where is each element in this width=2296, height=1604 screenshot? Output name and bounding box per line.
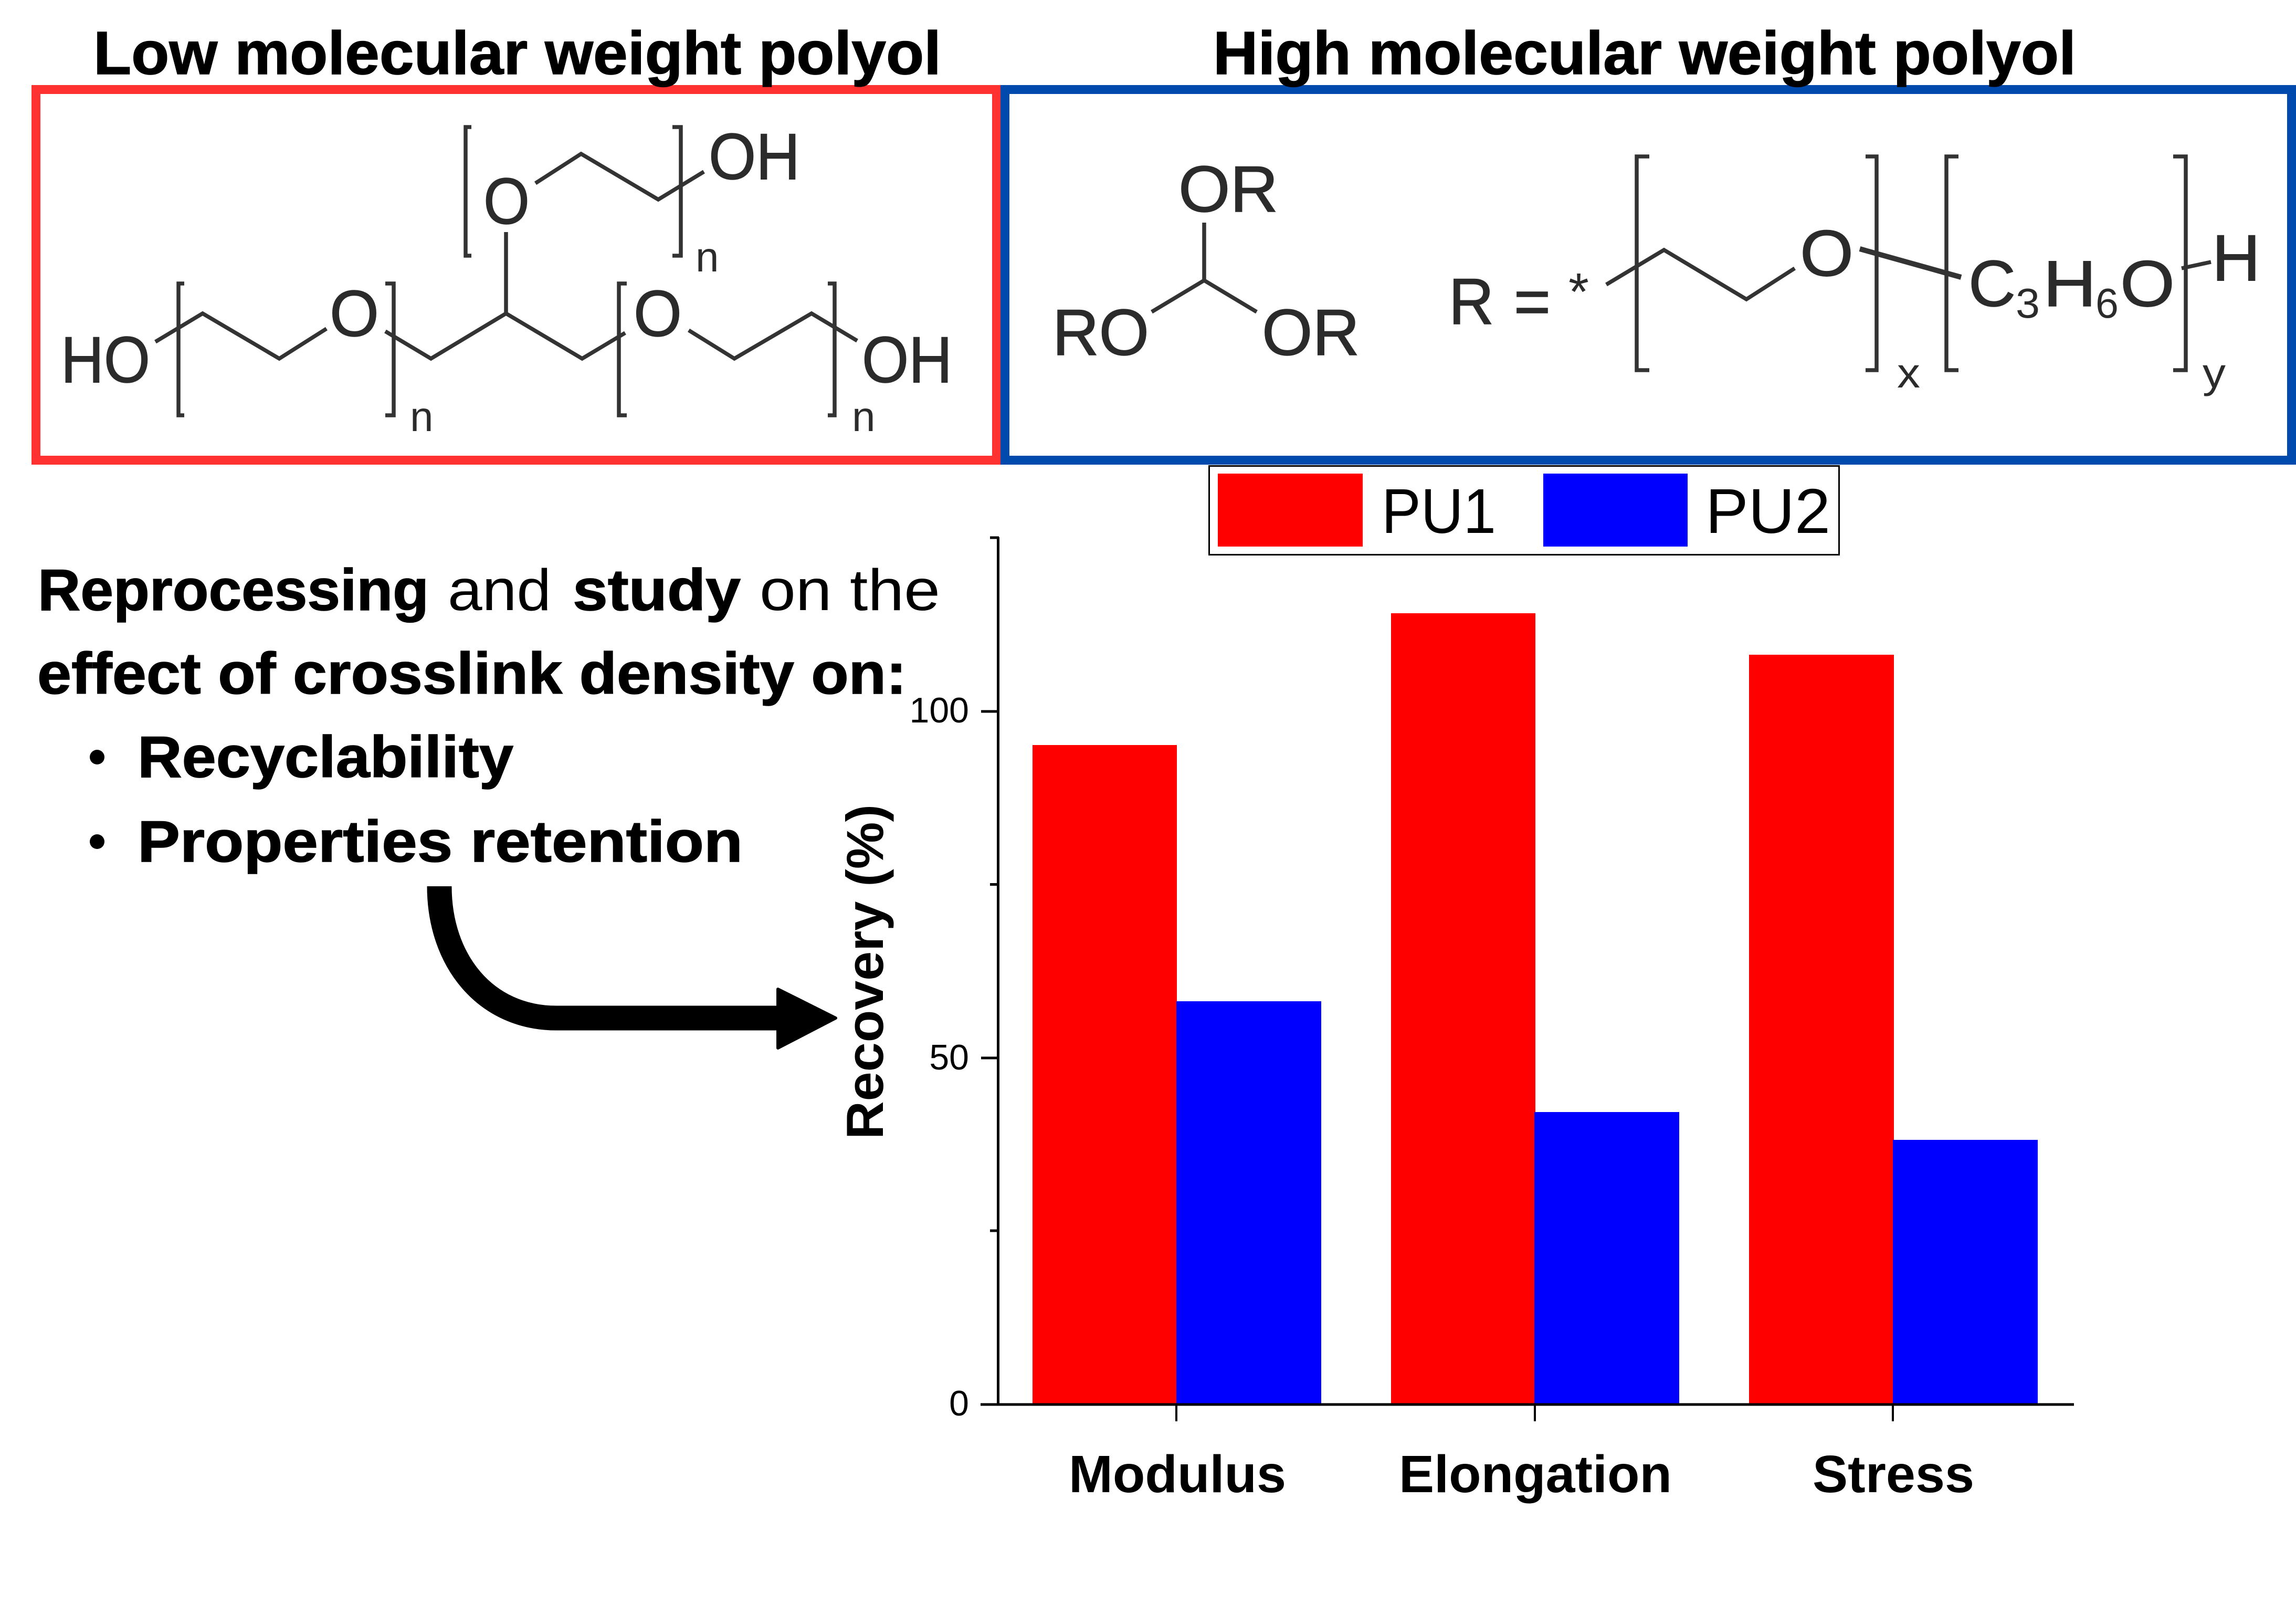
panel: low molecular weight polyol frame	[36, 89, 996, 460]
atom labels: HO	[61, 324, 150, 396]
chemical structure: high molecular weight polyol: y	[2203, 350, 2226, 396]
brackets	[178, 127, 835, 415]
chemical structure: high molecular weight polyol: RO	[1052, 297, 1149, 369]
chemical structure: high molecular weight polyol	[1052, 153, 2260, 396]
chemical structure: high molecular weight polyol: O	[1800, 217, 1853, 290]
bullet: properties retention: Properties retention	[138, 809, 743, 874]
category label: stress: Stress	[1813, 1445, 1974, 1504]
chemical structure: high molecular weight polyol: =	[1514, 266, 1551, 338]
y tick labels: 0	[949, 1383, 969, 1423]
legend label: PU1: PU1	[1382, 475, 1496, 547]
chemical structure: low molecular weight polyol: n	[696, 234, 719, 280]
y axis	[981, 537, 999, 1404]
legend swatch: PU2	[1543, 474, 1688, 547]
legend label: PU2: PU2	[1705, 475, 1830, 547]
bonds	[155, 154, 857, 359]
heading: low molecular weight polyol: Low molecular weight polyol	[93, 19, 941, 87]
bullet: recyclability: Recyclability	[138, 725, 513, 790]
bar chart: recovery percentage	[836, 537, 2074, 1504]
chemical structure: low molecular weight polyol	[61, 121, 952, 440]
chemical structure: low molecular weight polyol: O	[483, 165, 530, 238]
y tick labels	[910, 690, 969, 1423]
chemical structure: high molecular weight polyol: R	[1449, 266, 1494, 338]
text block: reprocessing study description: Reprocessing	[38, 558, 429, 623]
brackets	[1637, 156, 2186, 370]
bars: modulus	[1033, 745, 1321, 1403]
chemical structure: low molecular weight polyol: n	[410, 393, 434, 440]
x axis	[981, 1403, 2074, 1406]
y tick labels: 50	[929, 1037, 969, 1077]
heading: high molecular weight polyol: High molecular weight polyol	[1213, 19, 2076, 87]
chemical structure: low molecular weight polyol: O	[330, 278, 379, 350]
chemical structure: low molecular weight polyol: O	[634, 278, 682, 350]
text block: reprocessing study description	[37, 558, 940, 874]
chemical structure: low molecular weight polyol: OH	[709, 121, 800, 193]
legend	[1209, 466, 1839, 554]
y axis title: Recovery (%)	[836, 804, 894, 1139]
category label: elongation: Elongation	[1399, 1445, 1672, 1504]
chemical structure: high molecular weight polyol: O	[2120, 248, 2175, 320]
chemical structure: low molecular weight polyol: OH	[862, 324, 952, 396]
bonds	[1152, 223, 2211, 312]
text block: reprocessing study description: and	[448, 558, 551, 623]
chemical structure: low molecular weight polyol: n	[852, 393, 876, 440]
chemical structure: high molecular weight polyol: x	[1897, 350, 1920, 396]
chemical structure: high molecular weight polyol: 6	[2095, 280, 2119, 327]
chemical structure: high molecular weight polyol: H	[2212, 222, 2260, 295]
chemical structure: high molecular weight polyol: H	[2043, 248, 2097, 320]
bars: stress	[1749, 655, 2038, 1403]
chemical structure: high molecular weight polyol: *	[1568, 263, 1589, 321]
chemical structure: high molecular weight polyol: C	[1968, 248, 2016, 320]
text block: reprocessing study description: on the	[760, 558, 940, 623]
chemical structure: high molecular weight polyol: 3	[2016, 280, 2040, 327]
panel: high molecular weight polyol frame	[1005, 89, 2292, 460]
text block: reprocessing study description: study	[573, 558, 741, 623]
text block: reprocessing study description: effect of crosslink density on:	[37, 641, 907, 706]
y tick labels: 100	[910, 690, 969, 730]
bars: elongation	[1391, 613, 1679, 1403]
legend swatch: PU1	[1218, 474, 1363, 547]
atom labels: OR	[1178, 153, 1278, 226]
arrow: curved arrow from text to chart	[439, 886, 836, 1048]
chemical structure: high molecular weight polyol: OR	[1262, 297, 1360, 369]
category label: modulus: Modulus	[1069, 1445, 1286, 1504]
